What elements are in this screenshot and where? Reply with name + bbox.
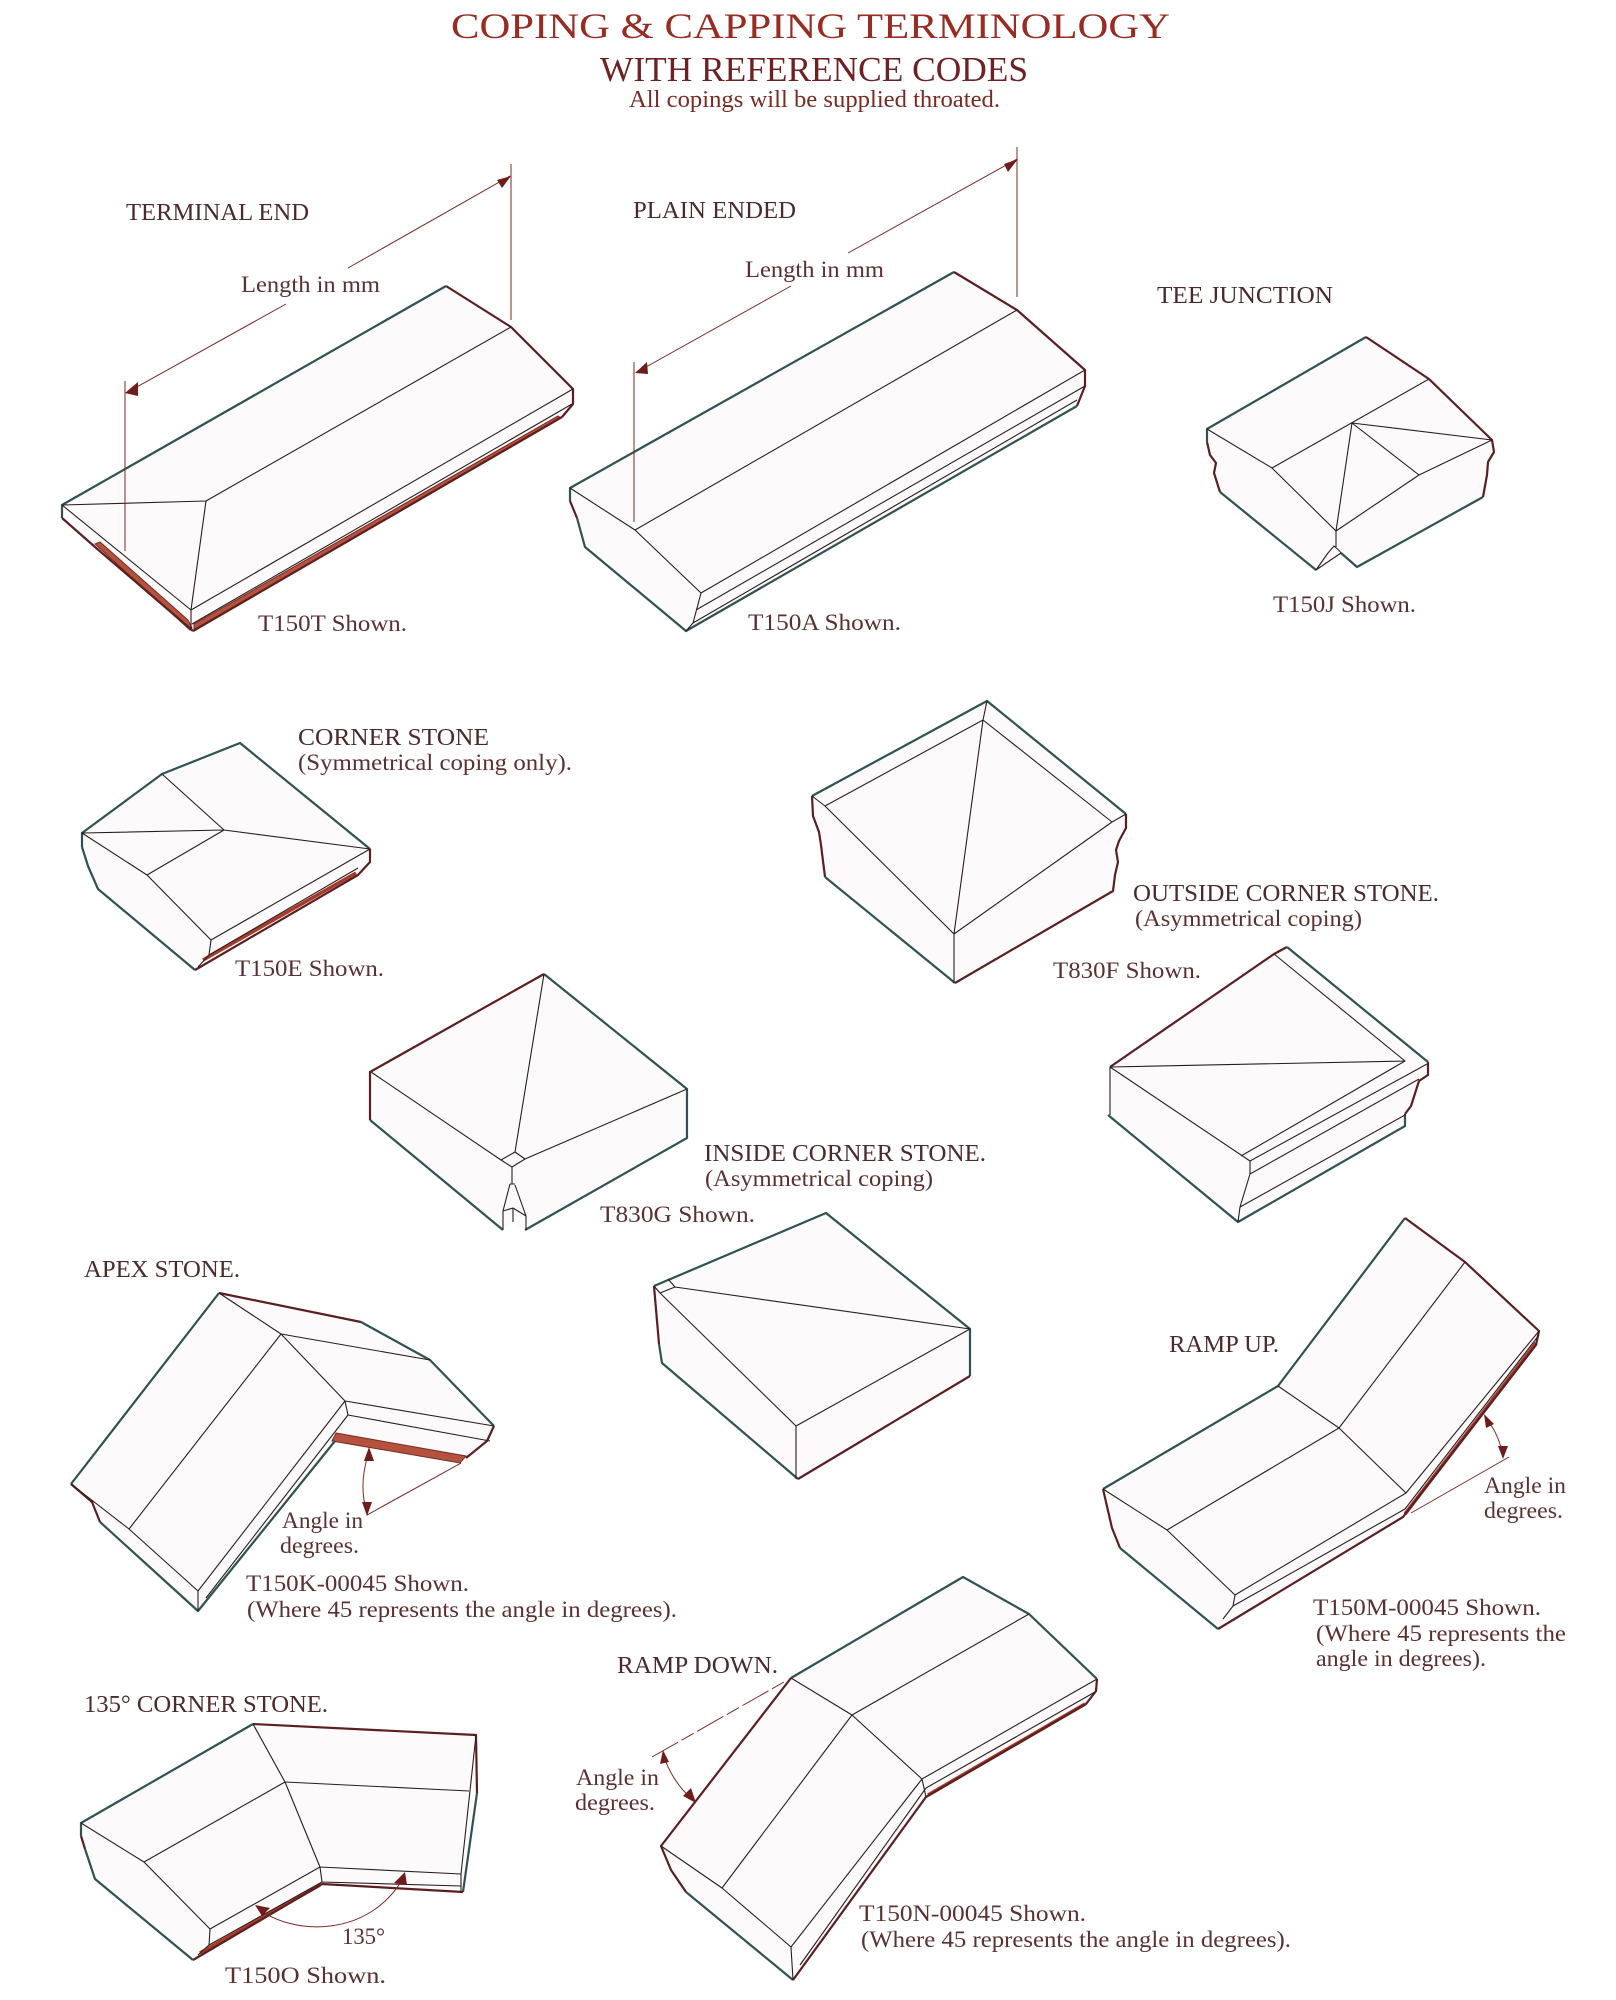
length dimension: Length in mm (241, 272, 380, 297)
heading: plain ended: PLAIN ENDED (633, 198, 796, 224)
angle dimension (1411, 1414, 1567, 1523)
stone: T150K (71, 1293, 494, 1611)
heading: outside corner stone: OUTSIDE CORNER STONE. (1133, 881, 1439, 907)
heading: ramp up: RAMP UP. (1169, 1332, 1279, 1358)
stone: T150E (82, 743, 370, 970)
heading: apex stone: APEX STONE. (84, 1257, 240, 1283)
heading: tee junction: TEE JUNCTION (1157, 283, 1333, 309)
note on throating: All copings will be supplied throated. (629, 87, 1000, 113)
angle dimension: 135° (342, 1924, 385, 1949)
angle dimension: degrees. (1484, 1498, 1563, 1523)
note: symmetrical: (Symmetrical coping only). (298, 750, 572, 775)
code: T830F: T830F Shown. (1053, 958, 1201, 983)
title block (451, 6, 1170, 113)
code: T150T: T150T Shown. (258, 611, 407, 636)
main title: COPING & CAPPING TERMINOLOGY (451, 6, 1170, 46)
stone: T150T (62, 286, 573, 631)
angle dimension: Angle in (282, 1508, 363, 1533)
heading: terminal end: TERMINAL END (126, 200, 309, 226)
stone: T150O (81, 1724, 477, 1960)
heading: corner stone: CORNER STONE (298, 725, 489, 751)
panel: inside corner stone (370, 974, 986, 1230)
panel: terminal end (62, 164, 573, 636)
code: T150J: T150J Shown. (1273, 592, 1416, 617)
panel: corner stone (82, 725, 572, 981)
note: angle meaning continued: angle in degrees). (1316, 1646, 1486, 1671)
stone: T150M (1103, 1218, 1539, 1629)
heading: ramp down: RAMP DOWN. (617, 1653, 778, 1679)
stone: T830F (812, 701, 1126, 983)
stone: T150N (661, 1577, 1097, 1980)
code: T150O: T150O Shown. (225, 1963, 386, 1988)
note: angle meaning: (Where 45 represents the (1316, 1621, 1566, 1646)
panel: tee junction (1157, 283, 1494, 617)
angle dimension: Angle in (1484, 1473, 1567, 1498)
code: T150A: T150A Shown. (748, 610, 901, 635)
panel: ramp up (1103, 1218, 1567, 1671)
panel: 135 degree corner stone (81, 1692, 477, 1988)
heading: 135 corner stone: 135° CORNER STONE. (84, 1692, 328, 1718)
panel: outside corner stone (812, 701, 1439, 983)
angle dimension (280, 1447, 461, 1558)
length dimension: Length in mm (745, 257, 884, 282)
heading: inside corner stone: INSIDE CORNER STONE. (704, 1141, 986, 1167)
code: T150K: T150K-00045 Shown. (246, 1571, 469, 1596)
stone: outside corner reverse view (1108, 947, 1428, 1222)
length dimension (125, 164, 511, 551)
stone: T150J (1207, 337, 1494, 570)
angle dimension (255, 1872, 407, 1949)
code: T150N: T150N-00045 Shown. (859, 1901, 1086, 1926)
code: T150M: T150M-00045 Shown. (1313, 1595, 1541, 1620)
stone: T830G (370, 974, 687, 1230)
note: angle meaning: (Where 45 represents the angle in degrees). (247, 1597, 677, 1622)
subtitle: WITH REFERENCE CODES (600, 50, 1028, 89)
code: T150E: T150E Shown. (235, 956, 384, 981)
note: angle meaning: (Where 45 represents the angle in degrees). (861, 1927, 1291, 1952)
panel: plain ended (570, 147, 1085, 635)
angle dimension (575, 1682, 784, 1815)
angle dimension: degrees. (280, 1533, 359, 1558)
stone: inside corner reverse view (654, 1213, 970, 1479)
stone: T150A (570, 272, 1085, 631)
angle dimension: degrees. (575, 1790, 655, 1815)
code: T830G: T830G Shown. (600, 1202, 755, 1227)
panel: apex stone (71, 1257, 677, 1622)
panel: ramp down (575, 1577, 1291, 1980)
angle dimension: Angle in (576, 1765, 660, 1790)
length dimension (634, 147, 1018, 522)
note: asymmetrical: (Asymmetrical coping) (1135, 906, 1362, 931)
note: asymmetrical: (Asymmetrical coping) (705, 1166, 933, 1191)
